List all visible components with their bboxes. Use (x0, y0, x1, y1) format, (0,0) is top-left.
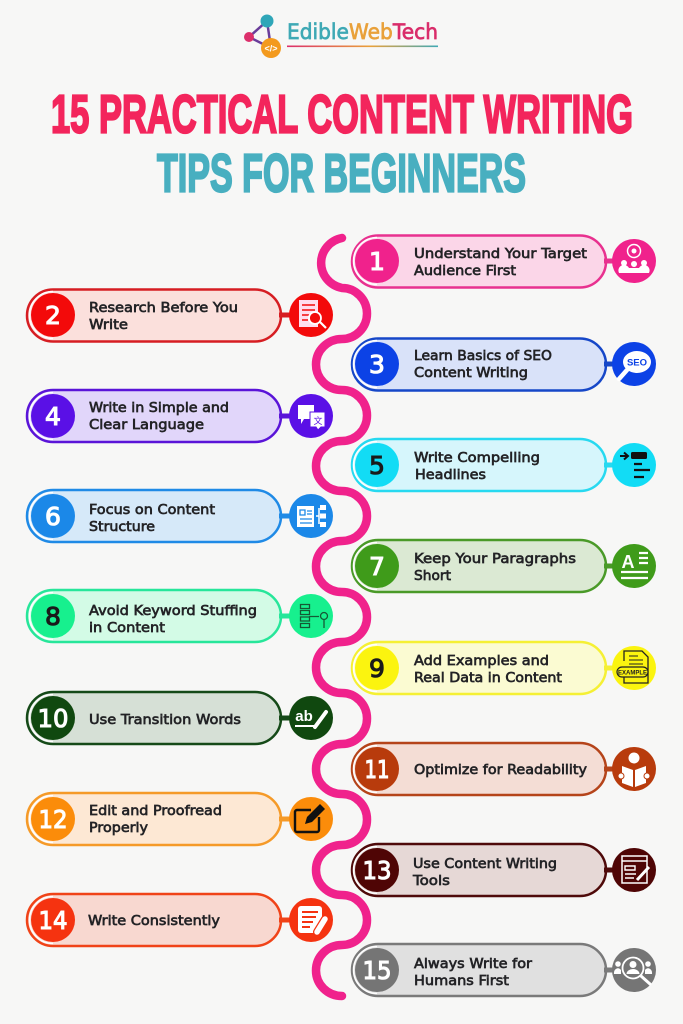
icon: keyword tree (289, 594, 333, 638)
tip 5 (352, 439, 656, 491)
tip 15 (352, 944, 656, 996)
tip 13 (352, 844, 656, 896)
tip 15: Humans First (414, 973, 509, 989)
tip 14: 14 (38, 906, 68, 935)
title (51, 84, 633, 204)
tip 1: 1 (369, 247, 385, 276)
tip 1: Audience First (414, 263, 516, 279)
tip 6: 6 (45, 502, 61, 531)
icon: SEO magnifier: SEO (627, 358, 647, 368)
tip 8: 8 (45, 602, 61, 631)
tip 11: Optimize for Readability (414, 762, 587, 778)
tip 8 (27, 590, 333, 642)
tip 8: in Content (89, 620, 165, 636)
icon: target and audience (612, 239, 656, 283)
tip 12: Edit and Proofread (89, 803, 222, 819)
icon: paragraph text: A (622, 552, 634, 572)
tip 5: Headlines (415, 467, 486, 483)
tip 7: Short (414, 568, 451, 584)
tip 2: Research Before You (89, 300, 238, 316)
tip 11: 11 (364, 755, 390, 784)
tip 2: 2 (45, 301, 61, 330)
tip 6: Focus on Content (89, 502, 215, 518)
tip 11 (352, 743, 656, 795)
tip 9 (352, 642, 656, 694)
logo: EdibleWebTech (287, 20, 438, 44)
wavy pink timeline (316, 238, 367, 996)
tip 5: 5 (369, 451, 385, 480)
tip 14: Write Consistently (88, 913, 220, 929)
tip 7 (352, 540, 656, 592)
tip 5: Write Compelling (414, 450, 540, 466)
icon: example document (612, 646, 656, 690)
icon: SEO magnifier (612, 342, 656, 386)
tip 4 (27, 390, 333, 442)
tip 13: Use Content Writing (413, 856, 557, 872)
tip 7: 7 (369, 552, 385, 581)
icon: note and pen (289, 898, 333, 942)
tip 3: 3 (369, 350, 385, 379)
tip 9: 9 (369, 654, 385, 683)
tip 3: Learn Basics of SEO (414, 348, 552, 364)
tip 7: Keep Your Paragraphs (414, 551, 576, 567)
icon: translation bubbles: 文 (313, 414, 323, 427)
tip 4: Clear Language (89, 417, 204, 433)
tip 13: 13 (362, 856, 392, 885)
tip 2: Write (89, 317, 128, 333)
icon: ab with pen (289, 696, 333, 740)
logo: </> (264, 44, 278, 54)
icon: edit pencil (289, 797, 333, 841)
tip 12: 12 (38, 805, 68, 834)
icon: headline list (612, 443, 656, 487)
tip 14 (27, 894, 333, 946)
icon: ab with pen: ab (295, 708, 313, 725)
icon: document search (289, 293, 333, 337)
logo (244, 14, 438, 58)
tip 15: 15 (362, 956, 392, 985)
tip 8: Avoid Keyword Stuffing (89, 603, 257, 619)
icon: person reading (612, 747, 656, 791)
tip 10: Use Transition Words (89, 712, 241, 728)
tip 9: Add Examples and (414, 653, 549, 669)
tip 15: Always Write for (414, 956, 532, 972)
tip 6 (27, 490, 333, 542)
tip 2 (27, 290, 333, 342)
tip 4: 4 (45, 402, 61, 431)
tip 1: Understand Your Target (414, 246, 587, 262)
tip 12 (27, 793, 333, 845)
tip 6: Structure (89, 519, 155, 535)
tip 4: Write in Simple and (89, 400, 229, 416)
tip 1 (352, 236, 656, 288)
tip 3 (352, 338, 656, 390)
tip 10 (27, 692, 333, 744)
icon: people search (612, 948, 656, 992)
tip 13: Tools (412, 873, 450, 889)
tip 10: 10 (38, 704, 68, 733)
icon: writing tool window (612, 848, 656, 892)
icon: paragraph text (612, 544, 656, 588)
tip 3: Content Writing (414, 365, 528, 381)
tip 9: Real Data in Content (414, 670, 562, 686)
icon: translation bubbles (289, 394, 333, 438)
icon: example document: EXAMPLE (618, 670, 647, 676)
icon: content structure (289, 494, 333, 538)
tip 12: Properly (89, 820, 148, 836)
